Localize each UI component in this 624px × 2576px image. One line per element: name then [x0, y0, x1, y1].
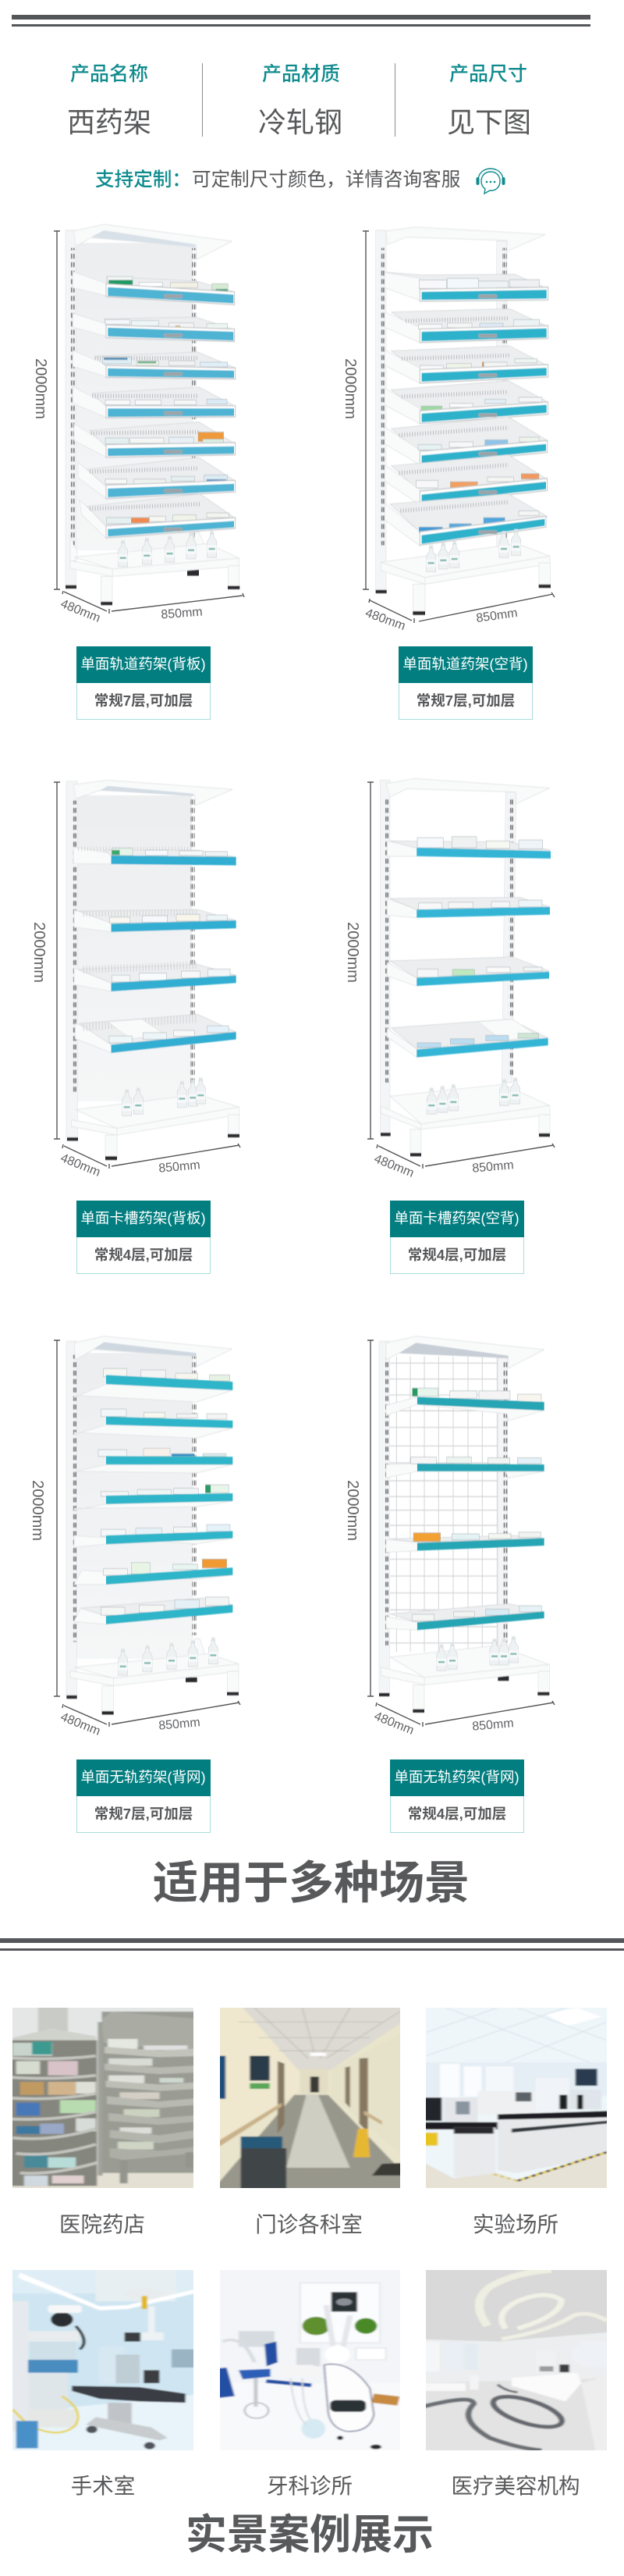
card: rail rack back panel: 常规7层,可加层	[94, 692, 193, 709]
height dimension 4	[344, 782, 374, 1139]
heading: scenes: 适用于多种场景	[153, 1858, 470, 1909]
section double rule	[0, 1938, 624, 1951]
height dimension 5	[29, 1340, 60, 1696]
height dimension 2: 2000mm	[342, 358, 359, 419]
spec: size	[447, 63, 531, 138]
rack illustration 1	[66, 224, 239, 605]
width dimensions 1: 480mm	[58, 597, 102, 625]
card: no-rail rack mesh	[76, 1759, 211, 1833]
width dimensions 3: 850mm	[158, 1158, 200, 1176]
card: rail rack open back	[399, 646, 533, 720]
width dimensions 3	[58, 1144, 240, 1179]
card: no-rail rack mesh: 单面无轨药架(背网)	[80, 1769, 206, 1784]
width dimensions 2: 850mm	[475, 607, 519, 625]
card: slot rack open back	[390, 1201, 524, 1274]
card: slot rack back panel: 单面卡槽药架(背板)	[80, 1210, 206, 1226]
product 2: rail rack open back	[342, 227, 555, 633]
spec: material: 产品材质	[262, 63, 340, 85]
width dimensions 2	[363, 592, 555, 633]
width dimensions 4	[372, 1144, 555, 1180]
card: slot rack open back: 常规4层,可加层	[408, 1247, 506, 1263]
product 5: no-rail rack with back panel	[29, 1336, 240, 1738]
rack illustration 2	[376, 227, 551, 615]
photo: outpatient corridor	[220, 2008, 400, 2188]
label: operating room: 手术室	[71, 2474, 135, 2498]
card: rail rack back panel	[76, 646, 211, 720]
rack illustration 3	[66, 780, 239, 1160]
width dimensions 5: 480mm	[58, 1710, 102, 1738]
wire mesh	[390, 1357, 498, 1652]
width dimensions 5: 850mm	[158, 1716, 200, 1733]
card: slot rack back panel	[76, 1201, 211, 1274]
rack illustration 5	[66, 1336, 239, 1714]
width dimensions 6	[372, 1701, 555, 1738]
height dimension 2	[342, 231, 369, 589]
label: medical beauty: 医疗美容机构	[451, 2474, 580, 2498]
width dimensions 5	[58, 1701, 240, 1738]
photo: operating room	[12, 2270, 193, 2450]
spec: material: 冷轧钢	[258, 106, 342, 138]
label: outpatient: 门诊各科室	[255, 2212, 363, 2236]
photo: dental clinic	[220, 2270, 400, 2450]
card: no-rail rack mesh: 常规7层,可加层	[94, 1806, 193, 1822]
height dimension 1: 2000mm	[32, 358, 49, 419]
spec: size: 产品尺寸	[449, 63, 527, 85]
spec: size: 见下图	[447, 106, 531, 138]
customization note: 支持定制：可定制尺寸颜色，详情咨询客服	[95, 169, 460, 190]
photo: laboratory	[426, 2008, 607, 2188]
rack illustration 4	[380, 778, 551, 1156]
width dimensions 6: 850mm	[472, 1717, 514, 1734]
rack illustration 6	[379, 1336, 549, 1713]
spec: product name: 产品名称	[70, 63, 148, 85]
width dimensions 4: 850mm	[472, 1158, 514, 1176]
spec: product name: 西药架	[67, 106, 151, 138]
card: no-rail rack mesh 4 layers	[390, 1759, 524, 1833]
label: lab: 实验场所	[473, 2212, 558, 2236]
width dimensions 1: 850mm	[161, 606, 203, 621]
width dimensions 2: 480mm	[363, 607, 407, 633]
photo: medical beauty institution	[426, 2270, 607, 2450]
top double rule	[12, 15, 590, 27]
label: dental clinic: 牙科诊所	[267, 2474, 353, 2498]
card: no-rail rack mesh 4 layers: 常规4层,可加层	[408, 1806, 506, 1822]
card: rail rack back panel: 单面轨道药架(背板)	[80, 656, 206, 671]
card: rail rack open back: 常规7层,可加层	[417, 692, 515, 709]
product 6: no-rail rack with mesh back	[344, 1336, 555, 1738]
card: no-rail rack mesh 4 layers: 单面无轨药架(背网)	[394, 1769, 519, 1784]
label: hospital pharmacy: 医院药店	[59, 2212, 145, 2236]
height dimension 6: 2000mm	[344, 1480, 361, 1541]
spec: material	[258, 63, 342, 138]
width dimensions 4: 480mm	[372, 1152, 416, 1180]
height dimension 5: 2000mm	[29, 1480, 46, 1541]
product 4: slot rack open back	[344, 778, 555, 1180]
card: rail rack open back: 单面轨道药架(空背)	[402, 656, 528, 671]
height dimension 1	[32, 231, 60, 589]
height dimension 6	[344, 1340, 374, 1696]
photo: hospital pharmacy	[12, 2008, 193, 2188]
heading: real cases: 实景案例展示	[186, 2512, 434, 2558]
product 3: slot rack with back panel	[30, 780, 240, 1179]
card: slot rack open back: 单面卡槽药架(空背)	[394, 1210, 519, 1226]
width dimensions 1	[58, 591, 244, 625]
width dimensions 3: 480mm	[58, 1151, 102, 1179]
height dimension 3: 2000mm	[30, 922, 48, 983]
width dimensions 6: 480mm	[372, 1710, 416, 1738]
card: slot rack back panel: 常规4层,可加层	[94, 1247, 193, 1263]
height dimension 4: 2000mm	[344, 922, 361, 983]
icon: headset chat bubble	[476, 168, 505, 195]
product 1: rail rack with back panel	[32, 224, 244, 625]
height dimension 3	[30, 782, 60, 1139]
spec: product name	[67, 63, 151, 138]
